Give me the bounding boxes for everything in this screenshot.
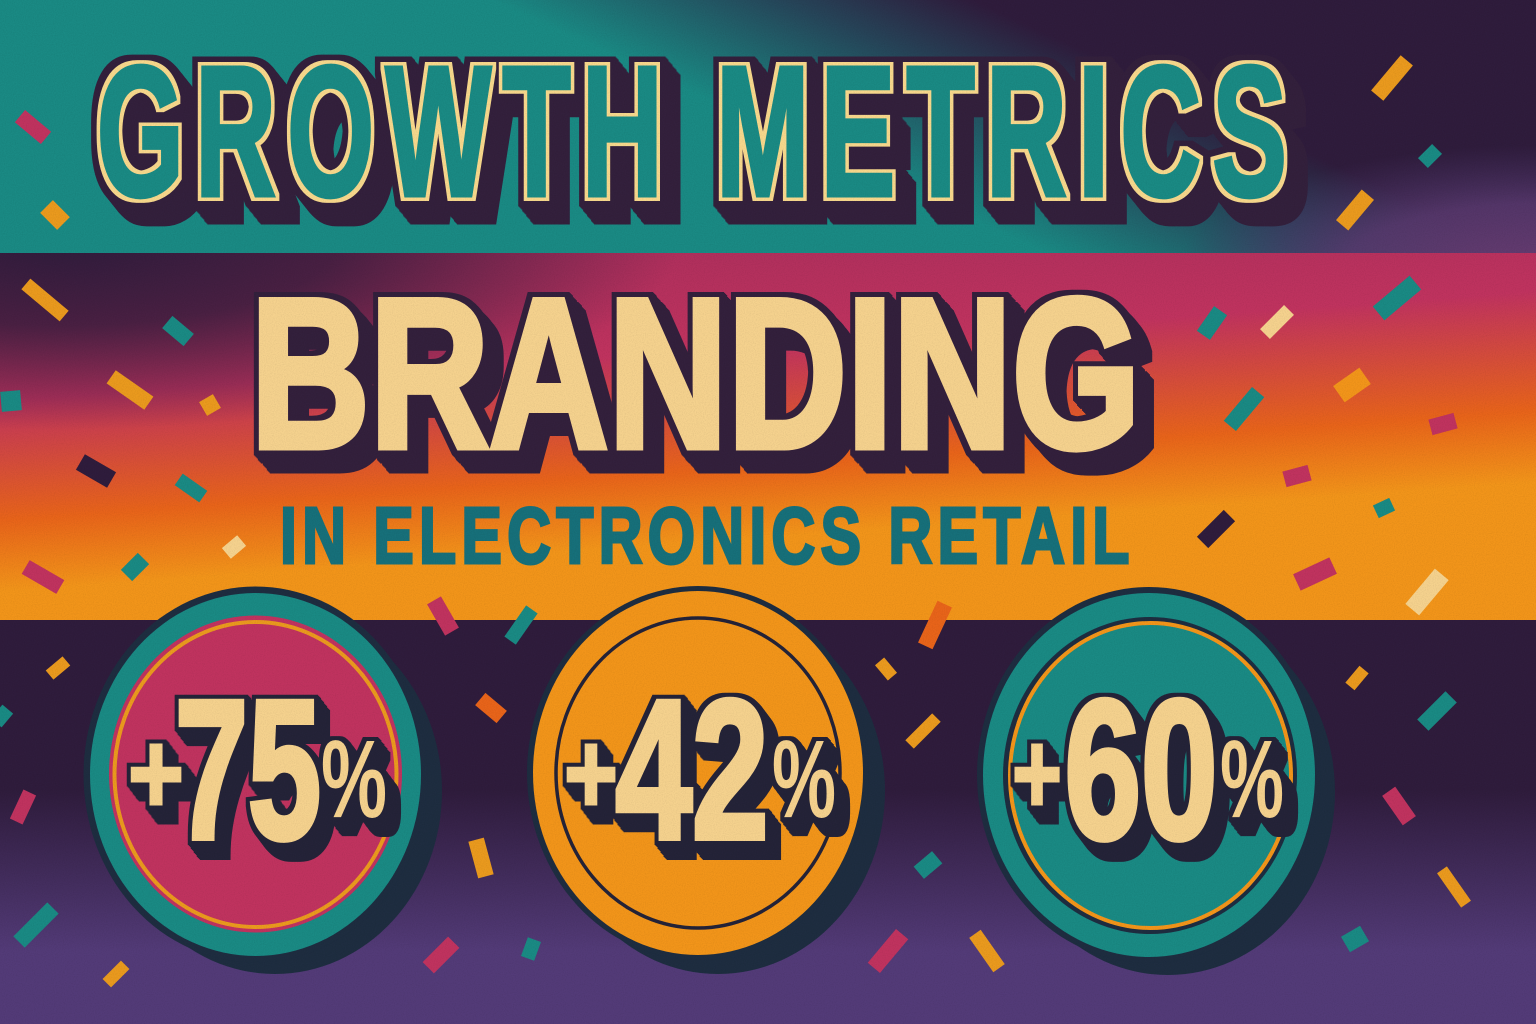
- badge: +42%: [527, 586, 885, 974]
- heading: branding: BRANDING: [250, 255, 1140, 493]
- value: 75: [175, 659, 321, 880]
- badge: +75%: [84, 586, 442, 974]
- badge shadow and ring: [977, 587, 1335, 975]
- value: %: [772, 718, 836, 841]
- badge shadow and ring: [84, 586, 442, 974]
- badge shadow and ring: [527, 586, 885, 974]
- value: %: [321, 718, 387, 841]
- badge: +60%: [977, 587, 1335, 975]
- value: +: [128, 708, 184, 838]
- value: 60: [1064, 659, 1218, 880]
- subtitle: IN ELECTRONICS RETAIL: [280, 492, 1135, 581]
- title: growth metrics: GROWTH METRICS: [97, 27, 1298, 235]
- value: 42: [616, 659, 768, 880]
- value: %: [1220, 718, 1284, 841]
- value: +: [564, 708, 618, 838]
- value: +: [1012, 708, 1062, 838]
